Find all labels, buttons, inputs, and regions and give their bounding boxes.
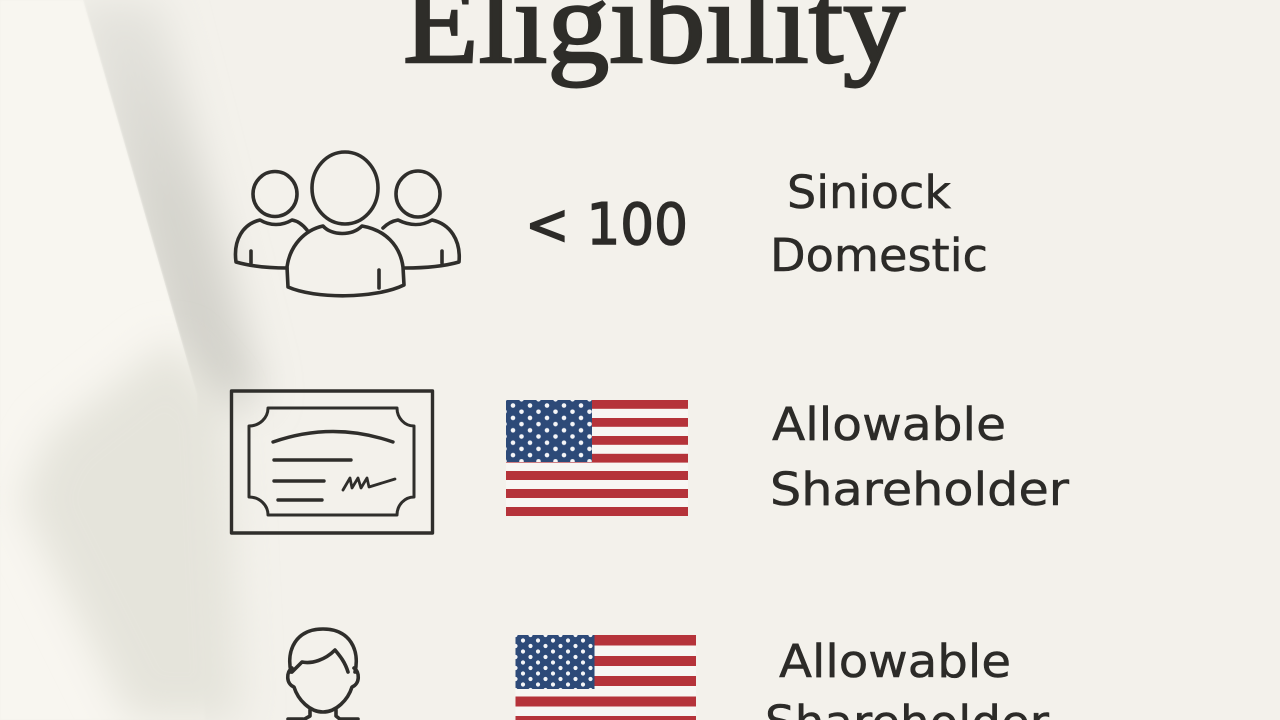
- icon: group of three people: [235, 152, 459, 296]
- stat: fewer than 100: < 100: [525, 192, 688, 258]
- paper background with folds: [34, 4, 268, 718]
- label: Allowable Shareholder, row 3: Allowable: [779, 635, 1011, 688]
- icon: US flag, row 3: [516, 635, 696, 720]
- label: Allowable Shareholder, row 2: Shareholder: [770, 463, 1070, 516]
- label: Allowable Shareholder, row 2: [770, 398, 1070, 516]
- label: Siniock Domestic: Siniock: [787, 166, 951, 219]
- label: Siniock Domestic: Domestic: [770, 229, 988, 282]
- label: Siniock Domestic: [770, 166, 988, 282]
- label: Allowable Shareholder, row 3: [765, 635, 1050, 720]
- icon: US flag, row 2: [506, 400, 688, 516]
- icon: stock certificate: [232, 391, 432, 533]
- label: Allowable Shareholder, row 2: Allowable: [772, 398, 1006, 451]
- icon: person: [288, 629, 358, 720]
